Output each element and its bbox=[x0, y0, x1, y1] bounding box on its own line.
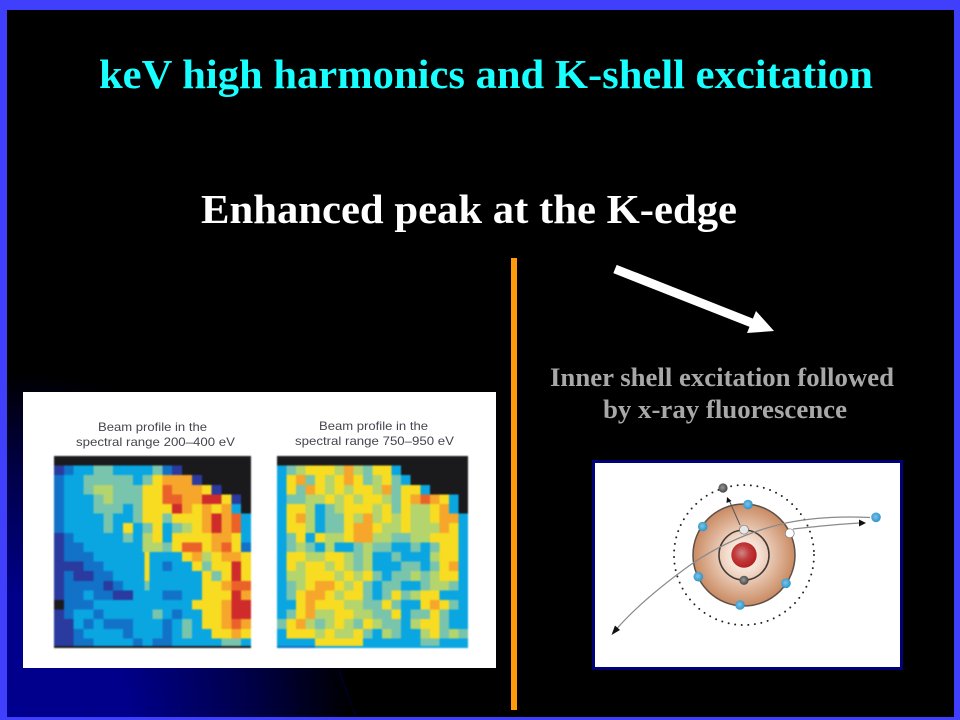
arrow: ejected inner electron bbox=[726, 497, 740, 525]
label: right beam profile: Beam profile in the bbox=[319, 419, 428, 433]
electrons: blue bbox=[694, 500, 881, 610]
arrow bbox=[615, 269, 774, 333]
subtitle: Enhanced peak at the K-edge bbox=[201, 186, 737, 232]
label: left beam profile: Beam profile in the bbox=[98, 420, 207, 434]
panel: beam profile image bbox=[23, 392, 496, 668]
arrow: fluorescence photon bbox=[859, 520, 866, 526]
scattered photon path bbox=[614, 517, 870, 632]
panel: atom diagram bbox=[592, 460, 903, 670]
heatmap: 750-950 eV bbox=[276, 455, 470, 650]
title: keV high harmonics and K-shell excitation bbox=[99, 51, 873, 97]
caption: inner shell excitation: by x-ray fluorescence bbox=[603, 394, 847, 424]
label: right beam profile bbox=[295, 419, 454, 448]
vertical divider bbox=[511, 258, 517, 710]
outer dotted shell bbox=[674, 485, 814, 625]
heatmap: 200-400 eV bbox=[53, 455, 252, 649]
electrons: gray bbox=[718, 483, 749, 585]
label: left beam profile: spectral range 200–400 eV bbox=[76, 435, 235, 449]
inner shell ring bbox=[719, 530, 769, 580]
label: left beam profile bbox=[76, 420, 235, 449]
caption: inner shell excitation: Inner shell excitation followed bbox=[550, 362, 894, 392]
label: right beam profile: spectral range 750–950 eV bbox=[295, 434, 454, 448]
electron holes bbox=[740, 525, 794, 538]
caption: inner shell excitation bbox=[550, 362, 894, 424]
nucleus bbox=[731, 542, 757, 568]
arrow: scattered electron bbox=[612, 626, 620, 635]
middle shell disc bbox=[693, 504, 795, 606]
